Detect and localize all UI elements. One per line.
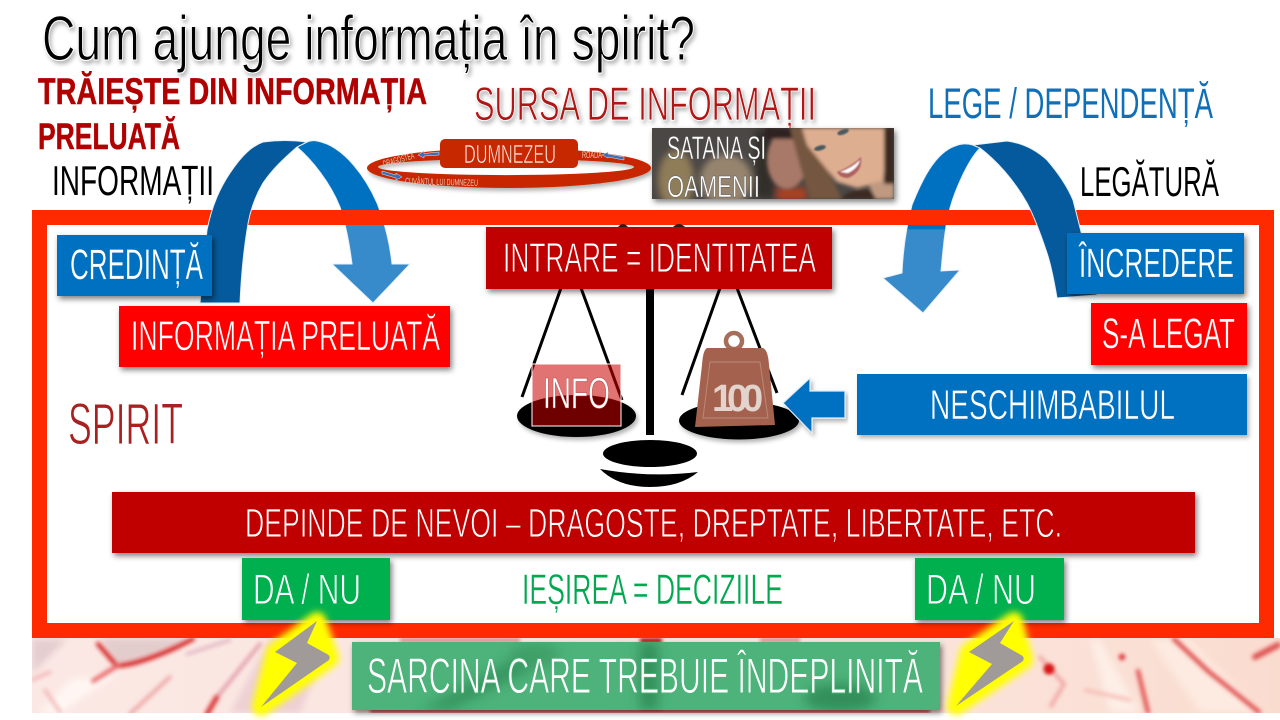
arrow: small blue arrow to weight: [783, 378, 845, 433]
ring arrow bottom: [382, 171, 402, 180]
box: intrare: [486, 227, 832, 289]
arrow: left curved arrow, rising part: [200, 140, 307, 303]
scale right pan: [679, 402, 799, 440]
scale top bumps: [618, 224, 685, 227]
info box on left pan: [532, 364, 621, 426]
credinta text: CREDINȚĂ: [70, 241, 203, 289]
ring arrow left: [418, 151, 439, 158]
tissue red spots: [370, 638, 1126, 713]
weight number: 100: [712, 378, 763, 420]
box: God: [440, 139, 578, 168]
icon: left lightning bolt: [261, 621, 330, 707]
scale base: [603, 440, 697, 467]
icon: weight 100: [695, 333, 775, 427]
brain tissue background strip: [32, 638, 1280, 714]
scale left chains: [522, 288, 622, 400]
heading: taken over: PRELUATĂ: [38, 116, 180, 157]
scale pole: [646, 285, 654, 435]
label: people: OAMENII: [667, 169, 760, 204]
heading: information source: SURSA DE INFORMAȚII: [474, 77, 816, 130]
yes/no right text: DA / NU: [926, 566, 1036, 614]
heading: lives from information: TRĂIEȘTE DIN INFORMAȚIA: [38, 71, 427, 113]
label: satan and: SATANA ȘI: [667, 130, 766, 166]
label: spirit: SPIRIT: [68, 392, 183, 457]
arrow: right curved arrow, rising part: [973, 141, 1097, 298]
box: informatia preluata: [119, 306, 450, 367]
ring word: word of God: CUVÂNTUL LUI DUMNEZEU: [405, 176, 478, 188]
arrow: left curved arrow, descending part: [297, 141, 410, 303]
ring arrow right: [602, 152, 624, 160]
box: yes/no left: [242, 558, 390, 620]
box: yes/no right: [915, 558, 1064, 620]
icon: right lightning bolt: [956, 621, 1024, 706]
panel: spirit red frame: [40, 218, 1266, 630]
box: incredere: [1067, 233, 1244, 294]
arrow: right curved arrow, descending part: [883, 144, 980, 313]
box: neschimbabilul: [857, 374, 1247, 435]
box: s-a legat: [1091, 303, 1247, 365]
scale right chains: [682, 288, 777, 395]
intrare text: INTRARE = IDENTITATEA: [503, 234, 816, 281]
scale left pan: [517, 395, 636, 437]
info text: INFO: [543, 369, 610, 418]
ring word: love: DRAGOSTEA: [382, 150, 415, 169]
label: God: DUMNEZEU: [464, 139, 556, 169]
diagram: God ring: [367, 139, 651, 188]
label: information: INFORMAȚII: [52, 157, 214, 204]
bar: depends on needs: [112, 492, 1195, 553]
box: credinta: [57, 235, 212, 296]
icon: scale: [517, 224, 799, 487]
informatia preluata text: INFORMAȚIA PRELUATĂ: [131, 312, 440, 359]
scale base crescent: [600, 469, 698, 487]
panel: green task box: [352, 642, 940, 712]
task text: SARCINA CARE TREBUIE ÎNDEPLINITĂ: [367, 648, 923, 704]
title: Cum ajunge informația în spirit?: [42, 4, 695, 74]
yes/no left text: DA / NU: [253, 566, 361, 614]
photo: satan and people: [652, 128, 894, 210]
label: output decisions: IEȘIREA = DECIZIILE: [522, 566, 783, 614]
ring word: fruit: ROADĂ: [582, 150, 602, 160]
